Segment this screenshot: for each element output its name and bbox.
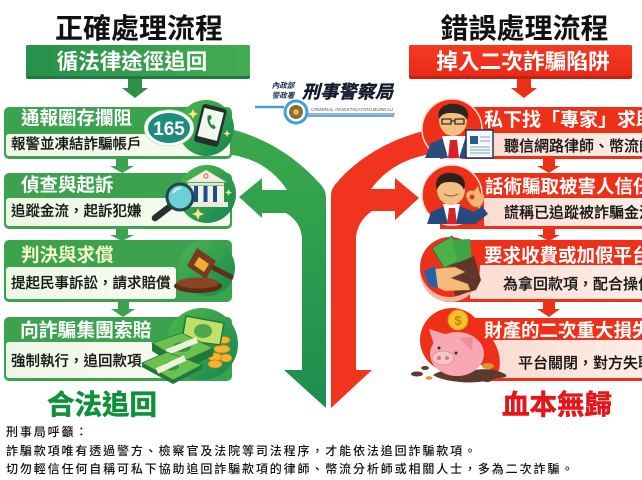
icon: green circle	[178, 165, 236, 223]
icon: 165 badge	[144, 110, 194, 146]
step 4 body	[6, 342, 166, 378]
icon: green circle	[178, 100, 234, 156]
step 2 card	[4, 173, 232, 229]
icon: magnifying glass	[155, 184, 193, 218]
step 4 heading: 向詐騙集團索賠	[20, 318, 152, 340]
panel: step 1 report	[4, 100, 234, 159]
panel: wrong step 1	[422, 99, 642, 159]
wrong step 1 body	[490, 133, 642, 156]
icon: money	[142, 316, 224, 384]
notice line 2: 切勿輕信任何自稱可私下協助追回詐騙款項的律師、幣流分析師或相關人士，多為二次詐騙。	[6, 461, 575, 476]
panel: wrong step 2	[422, 165, 642, 229]
icon: piggy bank	[429, 329, 484, 376]
wrong step 2 band	[440, 173, 642, 229]
arrow: step 2 to 3	[110, 229, 134, 241]
icon: red circle	[420, 308, 484, 372]
step 3 text: 提起民事訴訟，請求賠償	[11, 274, 171, 292]
step 3 body	[6, 267, 176, 299]
step 2 text: 追蹤金流，起訴犯嫌	[11, 202, 142, 220]
panel: wrong step 3	[420, 236, 642, 302]
icon: ok hand	[466, 186, 484, 207]
arrow: step 3 to 4	[111, 302, 135, 317]
text: bureau notice	[6, 424, 575, 476]
step 2 body	[6, 198, 230, 226]
step 3 heading: 判決與求償	[21, 244, 114, 266]
arrow: wrong step 2 to 3	[537, 229, 560, 241]
label: total loss: 血本無歸	[502, 389, 612, 420]
panel: wrong step 4	[411, 308, 642, 382]
arrow: step 1 to 2	[110, 159, 134, 173]
arrow: wrong step 3 to 4	[537, 302, 560, 317]
icon: green circle	[166, 308, 238, 380]
step 1 text: 報警並凍結詐騙帳戶	[11, 135, 142, 153]
icon: man with ok sign	[427, 173, 488, 224]
wrong step 2 body	[484, 198, 642, 226]
logo: criminal investigation bureau: CRIMINAL INVESTIGATION BUREAU	[311, 107, 394, 113]
step 1 body	[6, 134, 230, 156]
icon: mud puddle	[433, 369, 506, 382]
step 4 text: 強制執行，追回款項	[11, 353, 142, 370]
arrow: wrong step 1 to 2	[537, 159, 560, 173]
icon: scattered coins	[411, 363, 494, 382]
notice heading: 刑事局呼籲：	[6, 424, 89, 439]
icon: wallet with cash	[424, 236, 481, 296]
step 3 card	[4, 240, 232, 302]
logo: criminal investigation bureau: 刑事警察局	[302, 82, 395, 102]
icon: id document	[466, 130, 493, 158]
icon: 165 badge: 165	[153, 119, 185, 140]
logo: criminal investigation bureau: 內政部	[272, 81, 296, 90]
icon: gold coin: $	[454, 313, 462, 328]
icon: sparkles	[188, 109, 230, 137]
icon: courthouse	[184, 170, 228, 207]
icon: red circle	[422, 99, 482, 159]
logo: criminal investigation bureau: 警政署	[272, 91, 296, 100]
wrong step 4 body	[493, 340, 642, 378]
big red curved arrow	[331, 130, 436, 408]
panel: step 3 judgment	[4, 240, 235, 302]
wrong step 3 body	[470, 265, 642, 299]
wrong step 3 card	[445, 240, 642, 302]
icon: gavel	[174, 248, 231, 293]
banner: legal recovery	[26, 45, 250, 79]
logo: criminal investigation bureau	[255, 81, 395, 124]
panel: step 4 claim	[4, 308, 238, 384]
arrow: from green banner	[122, 79, 148, 98]
panel: step 2 investigation	[4, 165, 236, 229]
step 2 heading: 偵查與起訴	[21, 174, 114, 196]
icon: expert man	[425, 104, 484, 158]
label: legal recovery: 合法追回	[47, 389, 157, 420]
icon: red circle	[422, 165, 482, 225]
icon: coins	[208, 336, 232, 368]
icon: sparkles	[192, 189, 232, 220]
step 1 card	[4, 107, 232, 159]
step 1 heading: 通報圈存攔阻	[21, 108, 132, 128]
wrong step 4 band	[445, 318, 642, 381]
icon: green circle	[179, 240, 235, 296]
big green curved arrow	[226, 128, 326, 408]
title: correct process: 正確處理流程	[55, 13, 223, 44]
wrong step 1 band	[440, 107, 642, 159]
icon: phone	[194, 103, 227, 147]
icon: gold coin	[448, 310, 468, 330]
banner: secondary scam trap	[409, 45, 632, 79]
step 4 card	[4, 317, 232, 381]
notice line 1: 詐騙款項唯有透過警方、檢察官及法院等司法程序，才能依法追回詐騙款項。	[6, 443, 478, 458]
banner: legal recovery: 循法律途徑追回	[57, 49, 207, 74]
title: wrong process: 錯誤處理流程	[440, 13, 609, 44]
arrow: from red banner	[511, 79, 537, 98]
icon: red circle	[420, 237, 480, 297]
icon: pink disc	[420, 242, 480, 302]
banner: secondary scam trap: 掉入二次詐騙陷阱	[436, 49, 610, 74]
